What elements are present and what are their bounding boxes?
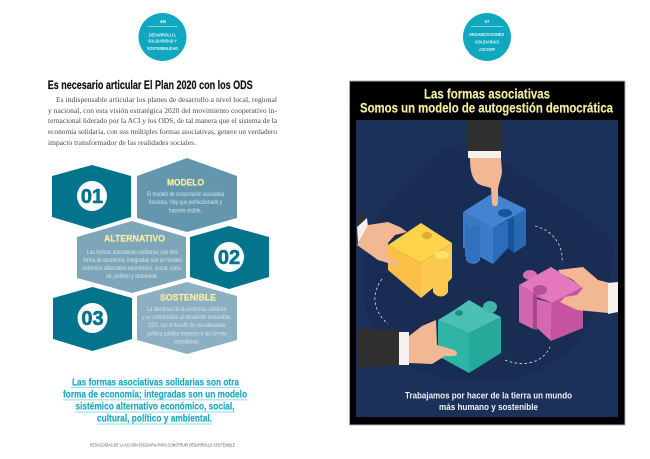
hexagon: alternativo: ALTERNATIVO [104,234,165,244]
hexagon 01 [52,165,131,229]
pull quote: sistémico alternativo económico, social, [76,401,235,413]
hexagon 03 [53,287,132,351]
hexagon: alternativo: sistémico alternativo económico, social, cultu- [82,265,182,272]
badge: page 47: SOLIDARIAS [475,40,499,45]
hand and suit, holding teal [357,320,457,368]
badge: page 47 [463,13,511,61]
hexagon: modelo: hacerlo visible. [169,208,202,214]
hexagon: modelo: funciona. Hay que perfeccionarlo y [149,199,223,206]
poster title: Las formas asociativas [424,86,550,102]
hand left, holding yellow [357,212,407,266]
puzzle: blue [463,193,526,264]
hexagon: sostenible: SOSTENIBLE [160,292,216,302]
heading: Es necesario articular El Plan 2020 con los ODS [48,78,253,92]
hexagon 02 [190,226,269,289]
body paragraph: economía solidaria, con sus múltiples formas asociativas, genere un verdadero [48,127,277,136]
body paragraph: ternacional liderado por la ACI y los ODS, de tal manera que el sistema de la [48,116,278,125]
pull quote: Las formas asociativas solidarias son otra [72,377,239,389]
badge: page 46 [138,13,186,61]
hexagon: alternativo: Las formas asociativas solidarias son otra [87,249,178,256]
hexagon: sostenible: ODS, son el desafío de una adecuada [148,322,225,329]
pull quote: forma de economía; integradas son un modelo [63,389,247,401]
poster caption: Trabajamos por hacer de la tierra un mundo [405,390,572,400]
hand right, holding pink [558,267,618,314]
badge: page 46: 46 [160,19,167,24]
badge: page 46: DESARROLLO, [149,32,176,37]
hexagon: modelo: MODELO [167,178,204,188]
hand pointing [470,158,502,206]
badge: page 47: ASCOOP [479,47,495,52]
badge: page 47: 47 [484,19,490,24]
illustration background [356,120,618,417]
puzzle: yellow [388,223,452,298]
hexagon: modelo [137,158,237,232]
hexagon: alternativo [77,221,186,293]
pull quote: cultural, político y ambiental. [97,413,212,425]
hexagon 02: 02 [218,247,240,269]
hexagon 03: 03 [81,308,104,330]
poster title [360,86,613,116]
hexagon: alternativo: forma de economía; integradas son un modelo [83,257,182,264]
hexagon: sostenible [137,282,237,354]
poster caption [405,390,572,412]
hexagon: modelo: El modelo de cooperación asociativa [147,191,224,198]
hexagon: alternativo: ral, político y ambiental. [106,273,158,280]
puzzle: teal [438,300,501,373]
pull quote [63,377,247,425]
hexagon 01: 01 [81,186,103,208]
badge: page 46: SOLIDARIDAD Y [148,39,177,44]
body paragraph [48,95,278,147]
puzzle: pink [519,267,583,341]
footer: PEDAGOGÍAS DE LA ACCIÓN SOLIDARIA PARA CONSTRUIR DESARROLLO SOSTENIBLE [90,442,235,448]
hexagon: sostenible: asociativas. [174,338,200,346]
suit and cuff: top hand [467,120,502,158]
body paragraph: y nacional, con esta visión estratégica 2020 del movimiento cooperativo in- [48,106,277,115]
dashed arrows [375,226,562,364]
hexagon: sostenible: y su contribución al desarrollo sostenible, [142,314,231,321]
poster caption: más humano y sostenible [439,402,538,412]
body paragraph: Es indispensable articular los planes de desarrollo a nivel local, regional [56,95,277,104]
poster panel [350,81,625,425]
badge: page 46: SOSTENIBILIDAD [147,46,179,51]
hexagon: sostenible: política pública respecto a las formas [147,330,227,338]
badge: page 47: ORGANIZACIONES [469,32,504,37]
hexagon: sostenible: La identidad de la economía solidaria [147,306,226,313]
body paragraph: impacto transformador de las realidades sociales. [48,138,196,147]
